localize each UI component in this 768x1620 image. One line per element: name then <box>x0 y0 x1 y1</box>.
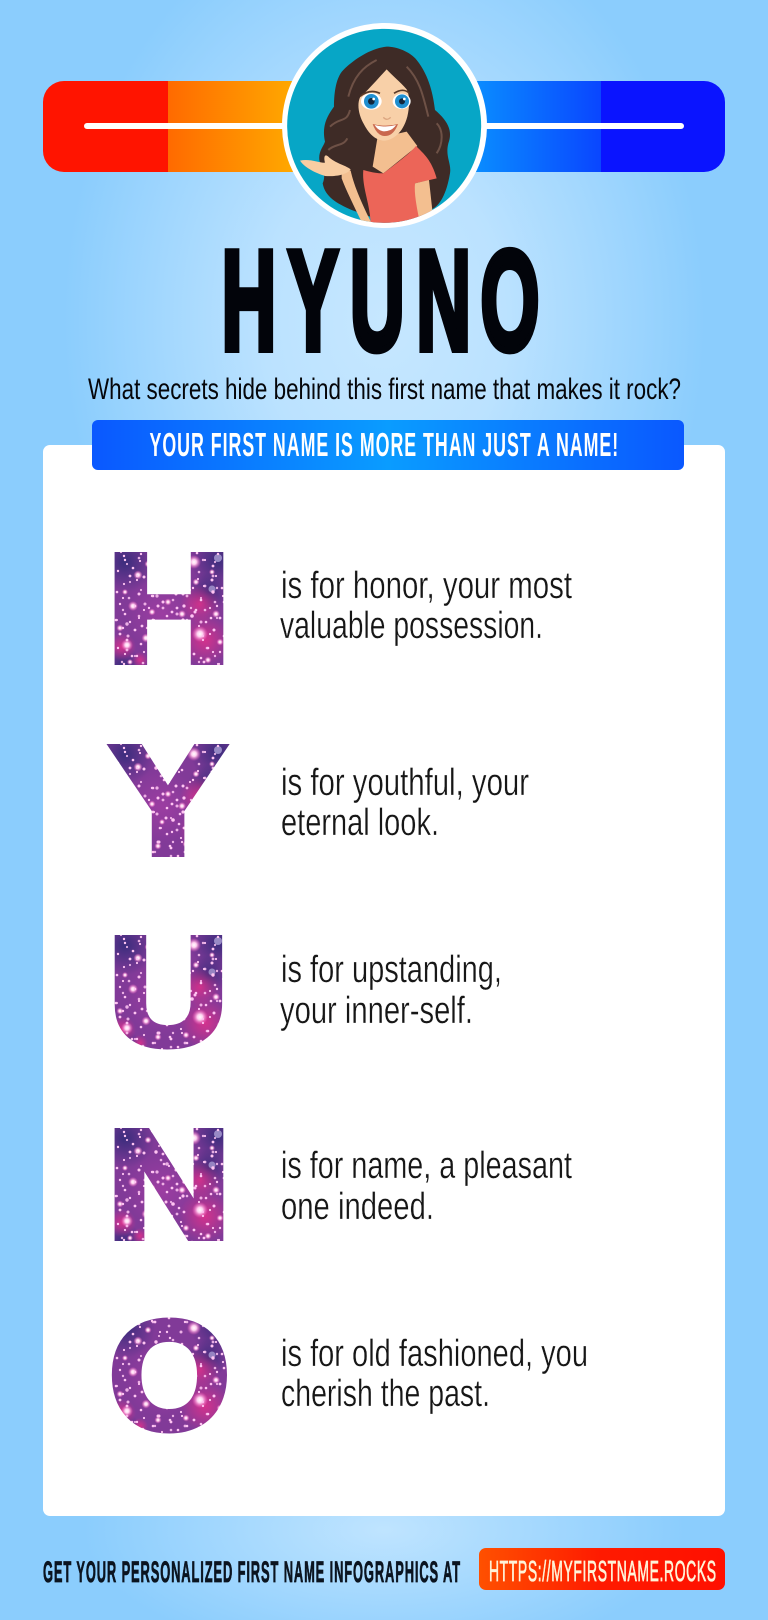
avatar: cartoon woman in circle <box>282 23 487 228</box>
description U <box>280 949 502 1032</box>
footer call to action text: GET YOUR PERSONALIZED FIRST NAME INFOGRAPHICS AT <box>43 1555 460 1588</box>
description U: your inner-self. <box>280 990 473 1032</box>
description O: cherish the past. <box>281 1373 490 1415</box>
description H <box>280 565 572 647</box>
footer url button <box>479 1548 725 1590</box>
header ribbon bar <box>43 81 725 172</box>
ribbon: red and orange left half <box>43 81 293 172</box>
description Y: is for youthful, your <box>281 762 529 804</box>
banner text: YOUR FIRST NAME IS MORE THAN JUST A NAME! <box>150 426 618 463</box>
description N: one indeed. <box>281 1186 434 1228</box>
ribbon: white line <box>84 123 684 129</box>
description U: is for upstanding, <box>281 949 502 991</box>
url text: HTTPS://MYFIRSTNAME.ROCKS <box>489 1554 716 1587</box>
description Y <box>281 762 529 844</box>
panel: white content card <box>43 445 725 1516</box>
description Y: eternal look. <box>281 802 439 844</box>
banner <box>92 420 684 470</box>
description O <box>281 1333 588 1415</box>
description N <box>281 1145 572 1228</box>
ribbon: blue right half <box>476 81 725 172</box>
